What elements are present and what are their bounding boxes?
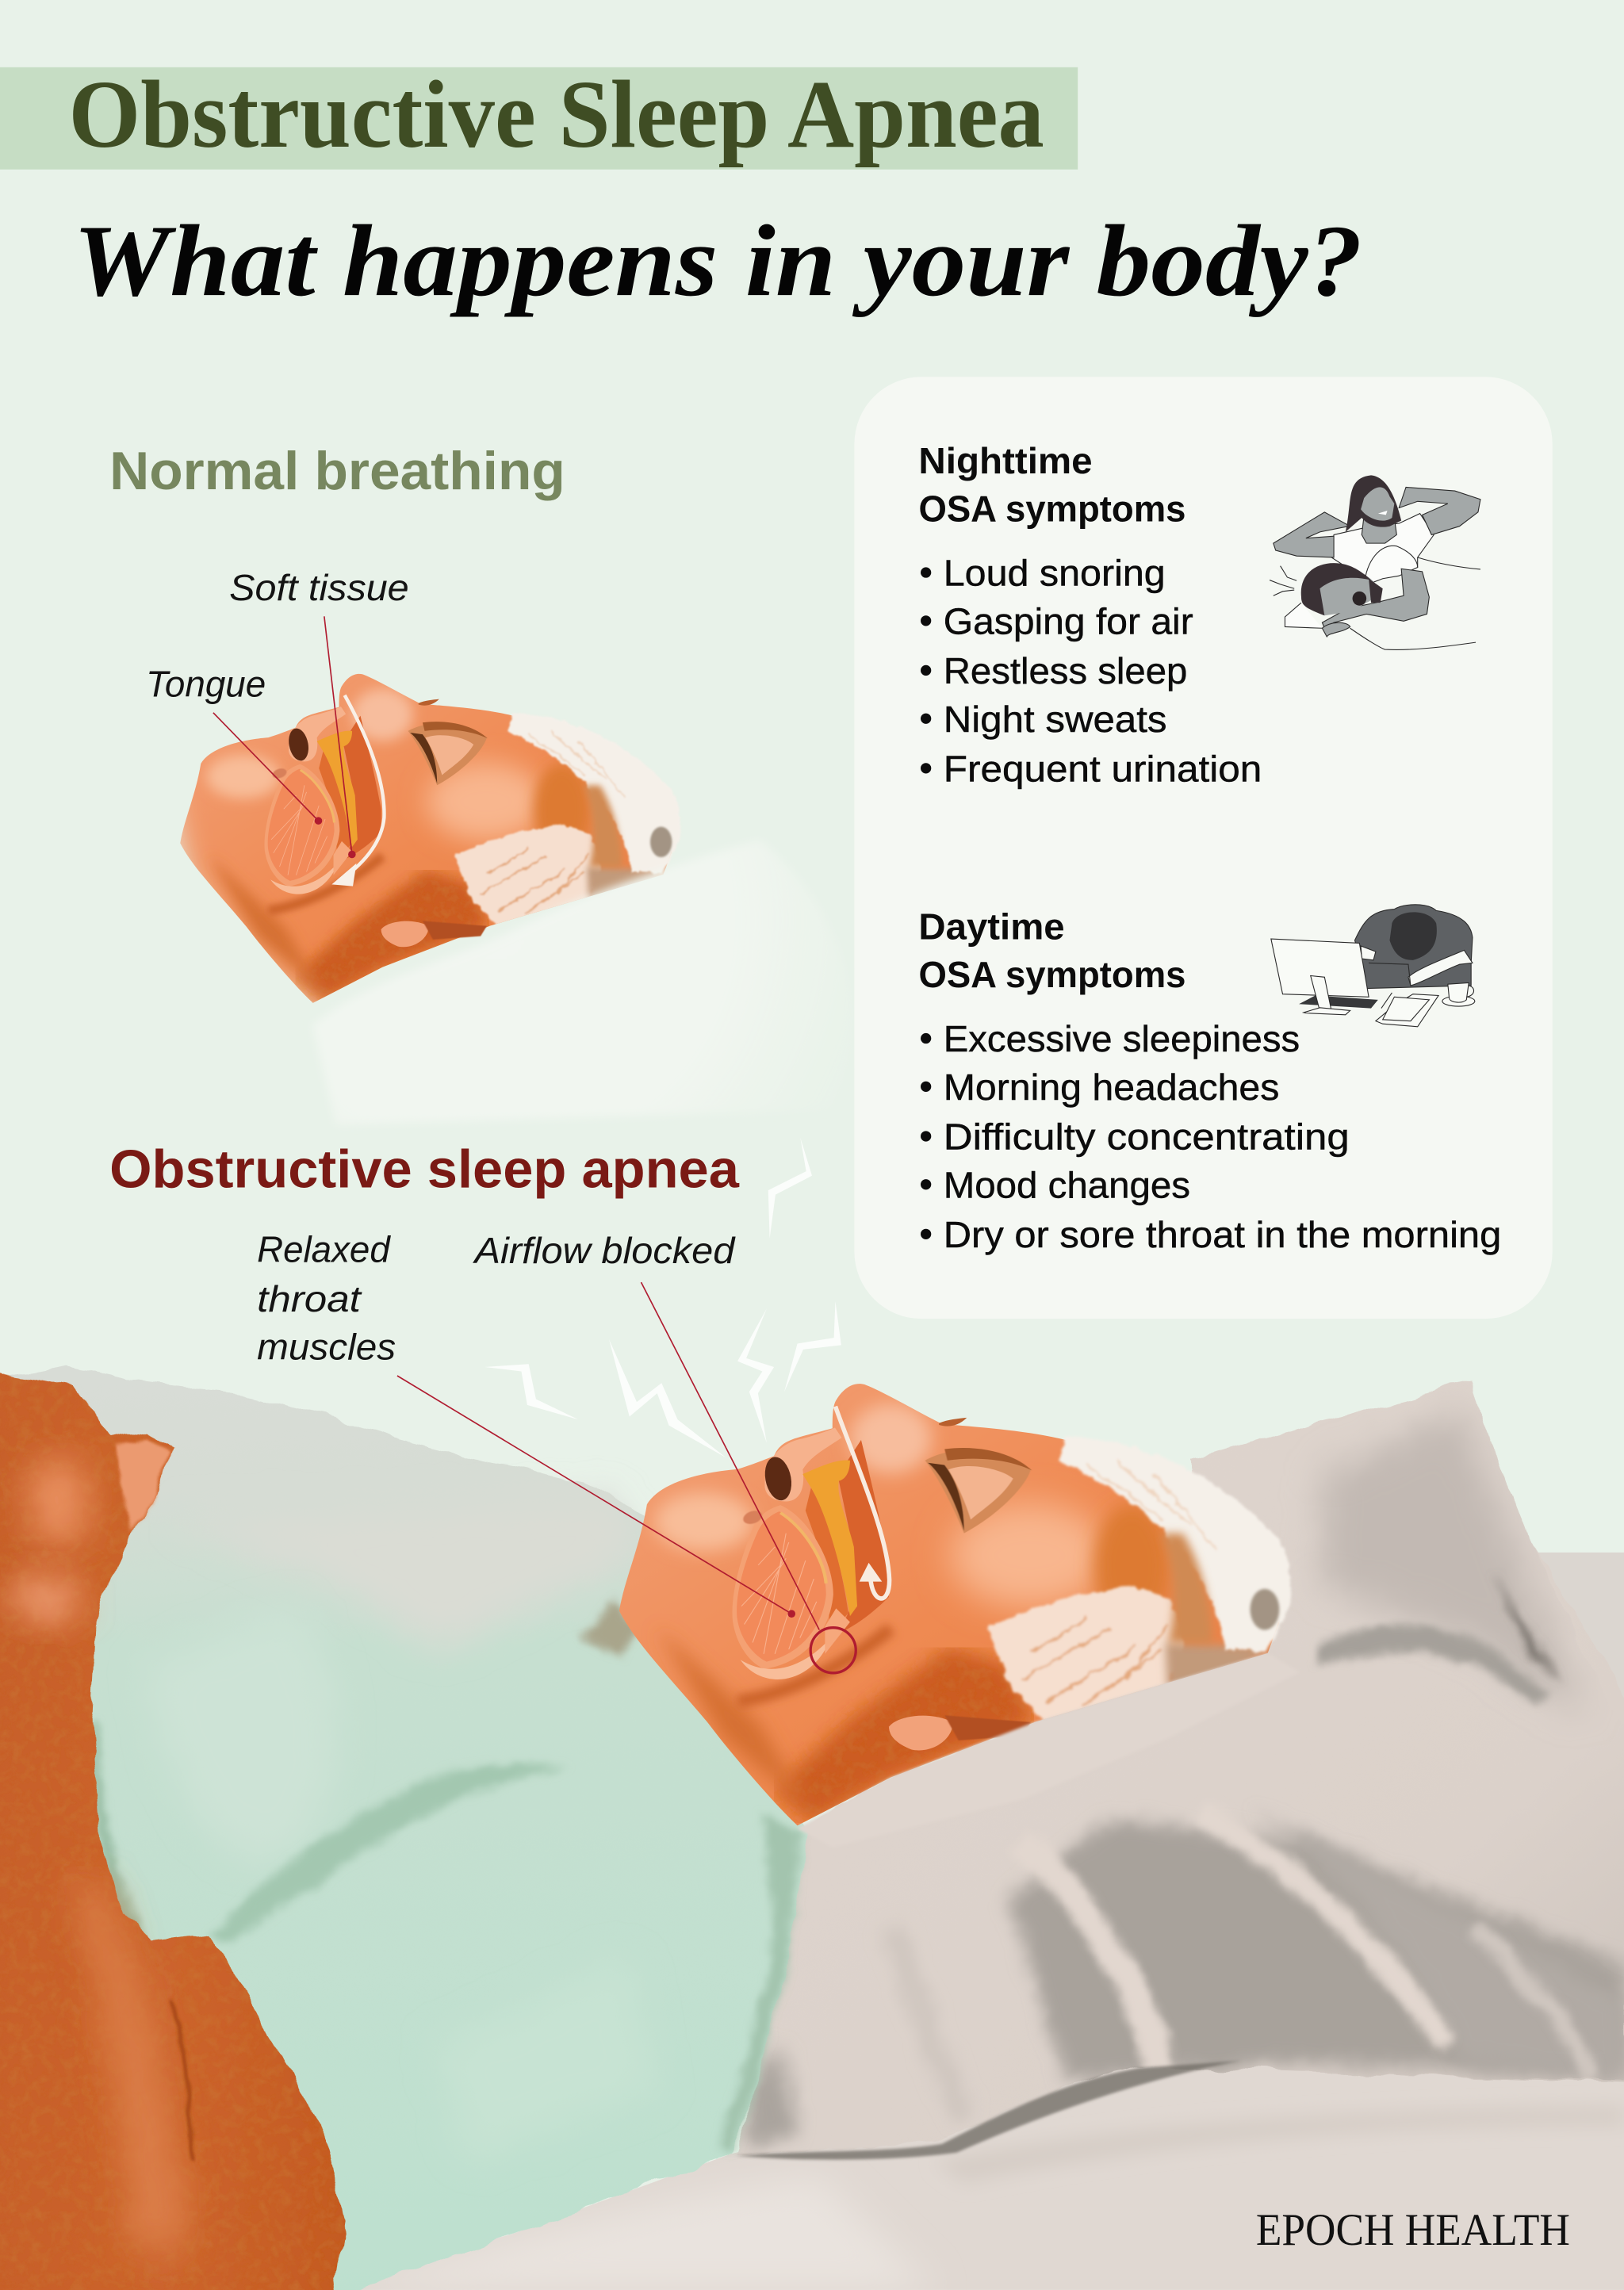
heading: daytime symptoms: Daytime	[918, 906, 1065, 947]
title banner: Obstructive Sleep Apnea	[69, 62, 1044, 168]
list: daytime symptoms: Difficulty concentrating	[944, 1116, 1350, 1158]
label: relaxed throat muscles: throat	[257, 1278, 362, 1319]
marker: blocked airway circle	[810, 1628, 856, 1673]
list: nighttime symptoms: Gasping for air	[944, 600, 1193, 641]
label: tongue: Tongue	[146, 664, 266, 705]
airflow arrow	[342, 695, 384, 879]
illustration: normal breathing head	[180, 616, 745, 1117]
illustration: arm	[0, 1365, 345, 2290]
label: relaxed throat muscles: muscles	[257, 1327, 396, 1368]
heading: nighttime symptoms: Nighttime	[918, 440, 1093, 481]
icon: tired man at desk with computer	[1271, 905, 1475, 1027]
pointer: soft tissue	[324, 616, 356, 858]
list: nighttime symptoms: Loud snoring	[944, 553, 1166, 594]
logo: Epoch Health: EPOCH HEALTH	[1256, 2205, 1570, 2255]
illustration: pillow	[734, 1381, 1624, 2155]
illustration: snoring lightning bolts	[485, 1138, 841, 1457]
subtitle: What happens in your body?	[73, 204, 1362, 317]
list: nighttime symptoms: Night sweats	[944, 699, 1167, 740]
heading: normal breathing: Normal breathing	[109, 441, 565, 501]
illustration: bed and wall	[292, 1553, 1624, 2290]
list: daytime symptoms	[921, 1018, 1501, 1255]
list: daytime symptoms: Morning headaches	[944, 1066, 1279, 1108]
list: nighttime symptoms: Frequent urination	[944, 748, 1262, 789]
heading: obstructive sleep apnea: Obstructive sleep apnea	[109, 1139, 740, 1199]
label: relaxed throat muscles	[257, 1228, 396, 1368]
pointer: tongue	[213, 713, 322, 825]
pillow edge over head	[798, 1653, 1300, 1848]
list: daytime symptoms: Dry or sore throat in the morning	[944, 1214, 1501, 1255]
label: soft tissue: Soft tissue	[229, 567, 409, 608]
airflow arrow	[835, 1407, 890, 1599]
bedding	[312, 840, 851, 1124]
pointer: airflow blocked	[642, 1282, 819, 1629]
pointer: throat muscles	[397, 1376, 795, 1618]
illustration: shirt	[0, 1365, 806, 2290]
heading: daytime symptoms: OSA symptoms	[918, 954, 1185, 995]
pillow shadow line	[734, 2061, 1241, 2160]
list: nighttime symptoms: Restless sleep	[944, 650, 1187, 691]
label: airflow blocked: Airflow blocked	[472, 1230, 736, 1271]
heading: nighttime symptoms: OSA symptoms	[918, 488, 1185, 530]
heading: daytime symptoms	[918, 906, 1185, 995]
label: relaxed throat muscles: Relaxed	[257, 1228, 391, 1269]
list: daytime symptoms: Mood changes	[944, 1164, 1190, 1205]
icon: woman covering ears beside snoring man	[1270, 475, 1480, 649]
panel: symptoms	[854, 377, 1553, 1319]
list: nighttime symptoms	[921, 553, 1262, 789]
heading: nighttime symptoms	[918, 440, 1185, 530]
list: daytime symptoms: Excessive sleepiness	[944, 1018, 1300, 1059]
illustration: sleeping man head, apnea	[397, 1282, 1300, 1848]
